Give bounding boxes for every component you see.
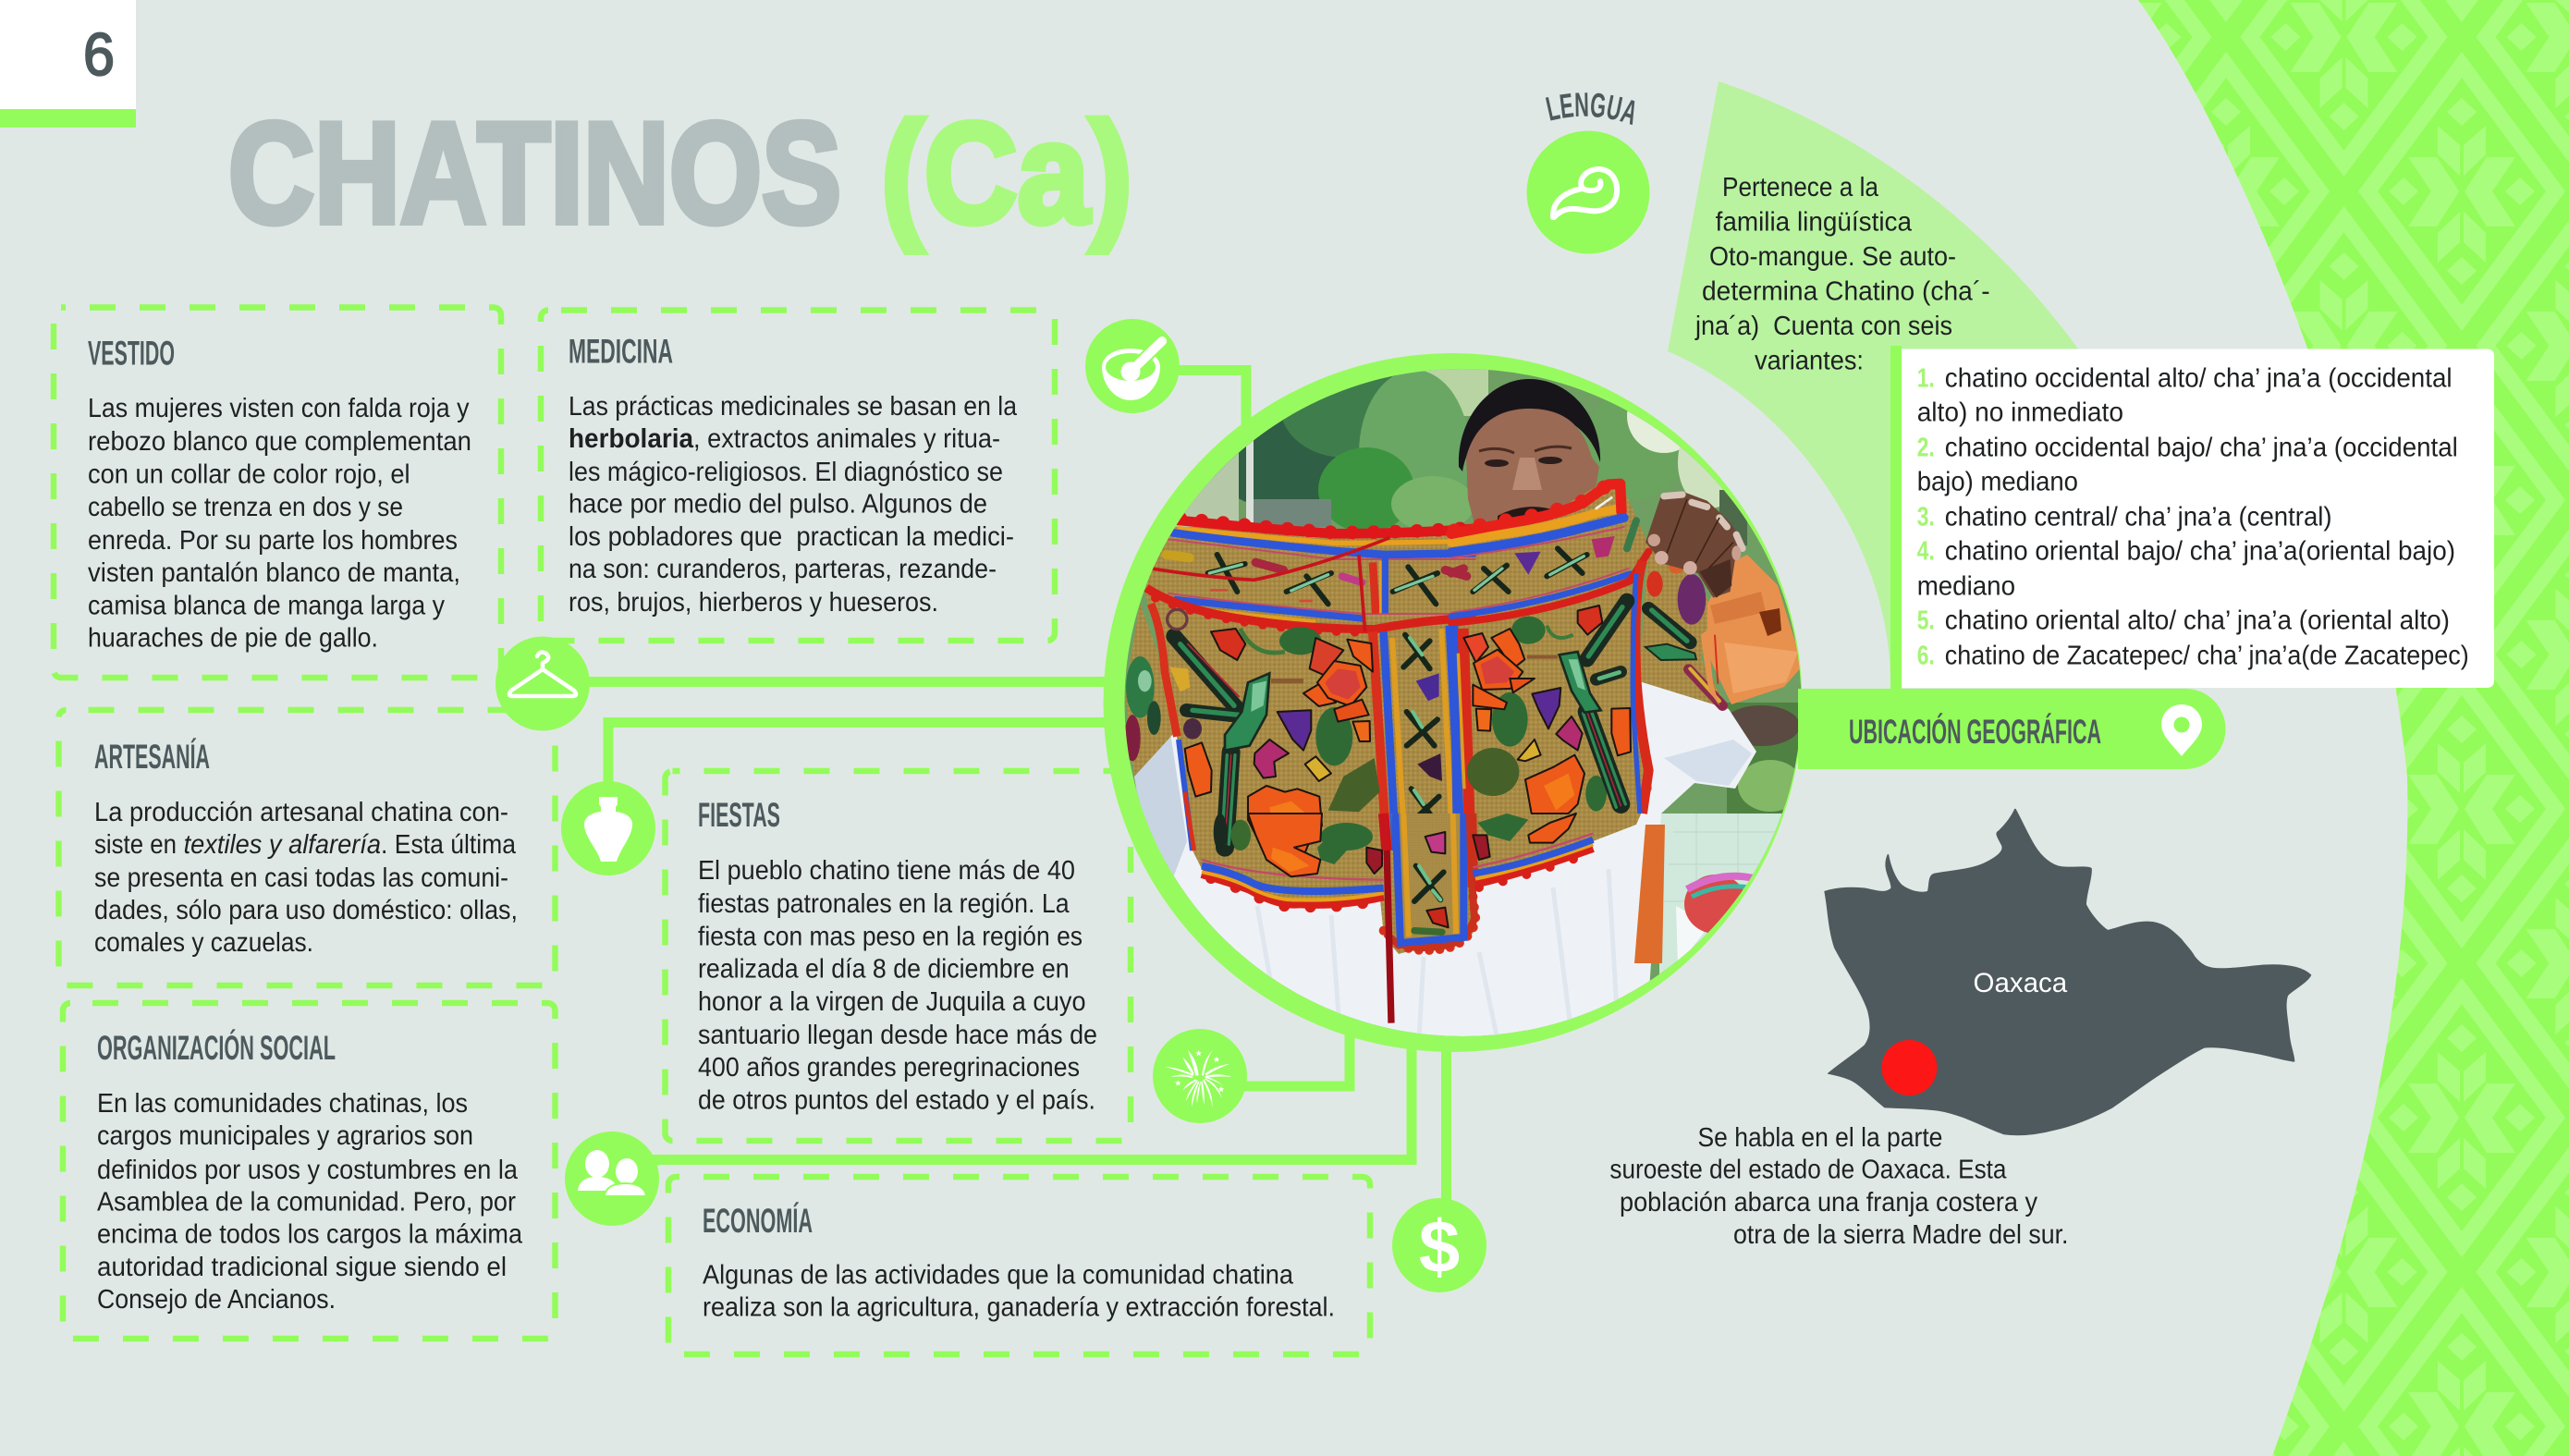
left flowers [1168, 609, 1373, 857]
collar borders right [1451, 483, 1648, 623]
red location marker [1881, 1040, 1937, 1095]
heading: medicina: MEDICINA [569, 333, 673, 370]
beaded blouse gold fabric [1125, 481, 1729, 954]
variant 5: 5. [1917, 606, 1935, 636]
embroidery detail, bottom hem [1202, 814, 1593, 1023]
text: vestido [88, 394, 471, 653]
text: lengua intro: Oto-mangue. Se auto- [1709, 242, 1956, 272]
orange sleeve [1707, 555, 1803, 704]
text: fiestas: de otros puntos del estado y el país. [698, 1085, 1095, 1115]
text: economía: Algunas de las actividades que la comunidad chatina [703, 1261, 1294, 1291]
hummingbird left [1174, 636, 1242, 848]
text: medicina: , extractos animales y ritua- [693, 424, 1000, 454]
text: lengua intro: determina Chatino (cha´- [1702, 277, 1990, 307]
variant 6: chatino de Zacatepec/ cha’ jna’a(de Zacatepec) [1945, 641, 2469, 670]
text: organización social: Consejo de Ancianos. [97, 1285, 336, 1315]
text: lengua intro: jna´a) Cuenta con seis [1694, 312, 1952, 341]
variant 4: 4. [1917, 537, 1935, 567]
text: artesanía: dades, sólo para uso doméstico: ollas, [94, 896, 518, 925]
heading: organización social: ORGANIZACIÓN SOCIAL [97, 1029, 336, 1067]
variant 2 [1917, 433, 2458, 497]
variants list box [1902, 349, 2494, 688]
title: (Ca) [881, 92, 1132, 253]
text: medicina: herbolaria [569, 424, 694, 454]
text: medicina: hace por medio del pulso. Algunos de [569, 490, 987, 520]
collar divider and ribbon [1151, 538, 1389, 631]
text: artesanía [94, 798, 518, 958]
text: vestido: Las mujeres visten con falda roja y [88, 394, 470, 423]
page number tab: 6 [83, 20, 115, 88]
text: location description [1609, 1123, 2069, 1250]
center strip [1391, 814, 1468, 945]
embroidery detail, left half [1124, 519, 1476, 857]
text: organización social: Asamblea de la comunidad. Pero, por [97, 1187, 516, 1217]
text: artesanía: comales y cazuelas. [94, 928, 313, 958]
white blouse cloth [1134, 679, 1756, 1045]
lengua sector background [1668, 81, 2145, 688]
center strip left side [1151, 604, 1472, 850]
text: organización social: En las comunidades chatinas, los [97, 1089, 468, 1119]
orange strip and second blouse [1634, 825, 1754, 966]
text: vestido: rebozo blanco que complementan [88, 427, 471, 457]
photo background: trees and terrace [1109, 356, 1812, 1045]
right leaves [1467, 617, 1607, 812]
text: vestido: huaraches de pie de gallo. [88, 623, 378, 653]
text: location description: población abarca una franja costera y [1620, 1188, 2037, 1217]
text: medicina [569, 392, 1018, 618]
title: CHATINOS [228, 92, 841, 253]
panel: organización social [63, 1003, 555, 1339]
map label: Oaxaca [1973, 968, 2068, 998]
variant 3: 3. [1917, 502, 1935, 532]
text: vestido: visten pantalón blanco de manta, [88, 558, 460, 588]
hem left [1202, 834, 1593, 907]
variant 2: 2. [1917, 433, 1935, 462]
text: fiestas: santuario llegan desde hace más de [698, 1021, 1097, 1050]
icon: hanger [495, 636, 590, 730]
variant 1: chatino occidental alto/ cha’ jna’a (occidental [1945, 363, 2453, 393]
text: medicina: los pobladores que practican la medici- [569, 522, 1014, 552]
text: vestido: cabello se trenza en dos y se [88, 493, 403, 522]
text: vestido: enreda. Por su parte los hombres [88, 526, 458, 556]
text: organización social: encima de todos los cargos la máxima [97, 1220, 523, 1250]
icon: clay vase [561, 781, 655, 875]
central photo: man holding embroidered blouse [1104, 353, 1812, 1052]
heading: artesanía: ARTESANÍA [94, 738, 210, 776]
curved heading: lengua [1549, 116, 1639, 128]
woven green pattern background [2080, 0, 2569, 1456]
text: economía: realiza son la agricultura, ganadería y extracción forestal. [703, 1292, 1335, 1322]
text: fiestas [698, 856, 1097, 1115]
text: fiestas: realizada el día 8 de diciembre en [698, 954, 1070, 984]
variant 2: chatino occidental bajo/ cha’ jna’a (occidental [1945, 433, 2458, 462]
icon: fireworks [1153, 1029, 1247, 1123]
hem motifs [1214, 814, 1576, 876]
text: artesanía: se presenta en casi todas las comuni- [94, 863, 508, 893]
text: artesanía: La producción artesanal chatina con- [94, 798, 508, 827]
embroidery detail, right half [1451, 483, 1744, 814]
heading: vestido: VESTIDO [88, 335, 175, 372]
variant 4 [1917, 537, 2455, 601]
connector lines to central photo [555, 370, 1446, 1220]
left sleeve bird [1124, 656, 1161, 761]
text: vestido: camisa blanca de manga larga y [88, 592, 445, 621]
man's head [1459, 379, 1600, 532]
heading: fiestas: FIESTAS [698, 796, 780, 834]
lengua label: LENGUA [1546, 92, 1634, 126]
collar motifs right [1451, 520, 1636, 592]
text: organización social: definidos por usos y costumbres en la [97, 1156, 519, 1185]
hand [1645, 492, 1744, 598]
strip motifs hem [1414, 866, 1444, 932]
icon: location pin [2161, 704, 2202, 756]
icon: dollar sign [1392, 1198, 1486, 1292]
text: medicina: ros, brujos, hierberos y hueseros. [569, 588, 938, 618]
variant 5: chatino oriental alto/ cha’ jna’a (oriental alto) [1945, 606, 2450, 636]
variant 3: chatino central/ cha’ jna’a (central) [1945, 502, 2332, 532]
text: artesanía: textiles y alfarería [184, 830, 381, 860]
ubicación geográfica pill: UBICACIÓN GEOGRÁFICA [1849, 713, 2101, 751]
text: location description: suroeste del estado de Oaxaca. Esta [1609, 1156, 2007, 1185]
text: organización social: autoridad tradicional sigue siendo el [97, 1253, 507, 1282]
variant 1: 1. [1917, 363, 1935, 393]
text: lengua intro [1694, 173, 1990, 375]
panel: fiestas [666, 771, 1131, 1141]
text: medicina: na son: curanderos, parteras, rezande- [569, 555, 997, 584]
text: lengua intro: variantes: [1755, 346, 1864, 375]
text: fiestas: El pueblo chatino tiene más de 40 [698, 856, 1075, 886]
right flowers [1463, 606, 1631, 814]
hummingbird right [1584, 601, 1627, 807]
variant 4: chatino oriental bajo/ cha’ jna’a(oriental bajo) [1945, 537, 2455, 567]
panel: artesanía [59, 710, 555, 985]
right edge of main panel [1454, 561, 1648, 814]
variant 1: alto) no inmediato [1917, 398, 2123, 428]
variant 4: mediano [1917, 571, 2015, 601]
text: lengua intro: Pertenece a la [1722, 173, 1879, 202]
icon: mortar and pestle [1085, 319, 1180, 413]
variant 6: 6. [1917, 641, 1935, 670]
text: artesanía: siste en [94, 830, 177, 860]
text: organización social [97, 1089, 523, 1315]
text: fiestas: 400 años grandes peregrinaciones [698, 1053, 1080, 1083]
ubicación geográfica pill [1798, 346, 2226, 769]
variant 1 [1917, 363, 2453, 428]
collar borders left [1146, 519, 1476, 632]
text: lengua intro: familia lingüística [1716, 207, 1913, 237]
text: medicina: Las prácticas medicinales se basan en la [569, 392, 1018, 422]
collar motifs left [1167, 555, 1467, 604]
map of Oaxaca [1825, 809, 2311, 1135]
panel: economía [668, 1177, 1370, 1354]
text: economía [703, 1261, 1335, 1322]
icon: people [565, 1132, 659, 1226]
icon: dollar sign: $ [1419, 1205, 1460, 1288]
panel: medicina [541, 311, 1055, 641]
panel: vestido [54, 307, 501, 678]
text: location description: Se habla en el la parte [1697, 1123, 1942, 1153]
text: fiestas: honor a la virgen de Juquila a cuyo [698, 987, 1085, 1017]
icon: speech scroll [1527, 131, 1649, 253]
text: medicina: les mágico-religiosos. El diagnóstico se [569, 458, 1003, 487]
page number tab [0, 0, 136, 128]
text: organización social: cargos municipales y agrarios son [97, 1121, 473, 1151]
heading: economía: ECONOMÍA [703, 1202, 813, 1240]
lengua label [1546, 92, 1634, 126]
text: fiestas: fiesta con mas peso en la región es [698, 923, 1083, 952]
left leaves and vines [1229, 627, 1380, 850]
variant 2: bajo) mediano [1917, 468, 2078, 497]
text: vestido: con un collar de color rojo, el [88, 460, 410, 490]
text: fiestas: fiestas patronales en la región. La [698, 889, 1070, 919]
right sleeve embroidery [1645, 560, 1722, 705]
text: artesanía: . Esta última [381, 830, 517, 860]
text: location description: otra de la sierra Madre del sur. [1733, 1220, 2069, 1250]
strip motifs left [1403, 635, 1439, 825]
